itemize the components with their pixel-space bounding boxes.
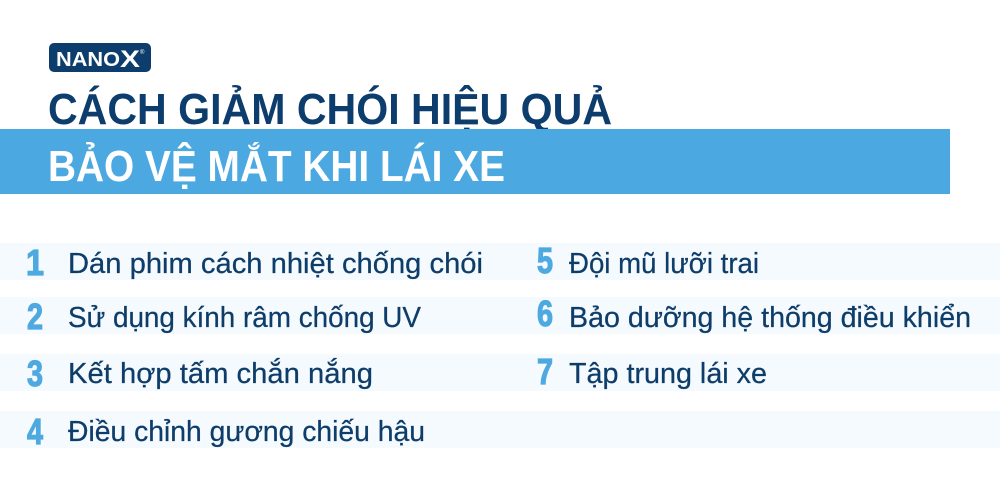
title band — [0, 129, 950, 194]
item 2: 2 — [27, 296, 43, 337]
logo: NANOX badge: X — [120, 46, 140, 73]
item 6: 6 — [537, 293, 553, 334]
logo: NANOX badge: ® — [140, 49, 145, 56]
list row backgrounds — [0, 243, 1000, 448]
item 4: Điều chỉnh gương chiếu hậu — [68, 416, 425, 448]
item 7: Tập trung lái xe — [569, 358, 767, 390]
item 2 — [27, 296, 422, 337]
item 1: Dán phim cách nhiệt chống chói — [68, 248, 483, 280]
title line 1: CÁCH GIẢM CHÓI HIỆU QUẢ — [48, 84, 612, 134]
item 6: Bảo dưỡng hệ thống điều khiển — [569, 302, 971, 334]
item 4 — [27, 411, 425, 452]
item 1: 1 — [26, 242, 44, 283]
item 7: 7 — [537, 351, 553, 392]
item 5: 5 — [537, 240, 553, 281]
item 3: 3 — [27, 353, 43, 394]
item 5 — [537, 240, 759, 281]
logo: NANOX badge: NANO — [56, 49, 120, 71]
item 7 — [537, 351, 767, 392]
logo: NANOX badge — [49, 43, 151, 73]
item 4: 4 — [27, 411, 43, 452]
item 5: Đội mũ lưỡi trai — [569, 248, 759, 280]
item 2: Sử dụng kính râm chống UV — [68, 302, 422, 334]
item 3 — [27, 353, 373, 394]
item 3: Kết hợp tấm chắn nắng — [68, 357, 373, 390]
title line 2: BẢO VỆ MẮT KHI LÁI XE — [48, 141, 505, 191]
